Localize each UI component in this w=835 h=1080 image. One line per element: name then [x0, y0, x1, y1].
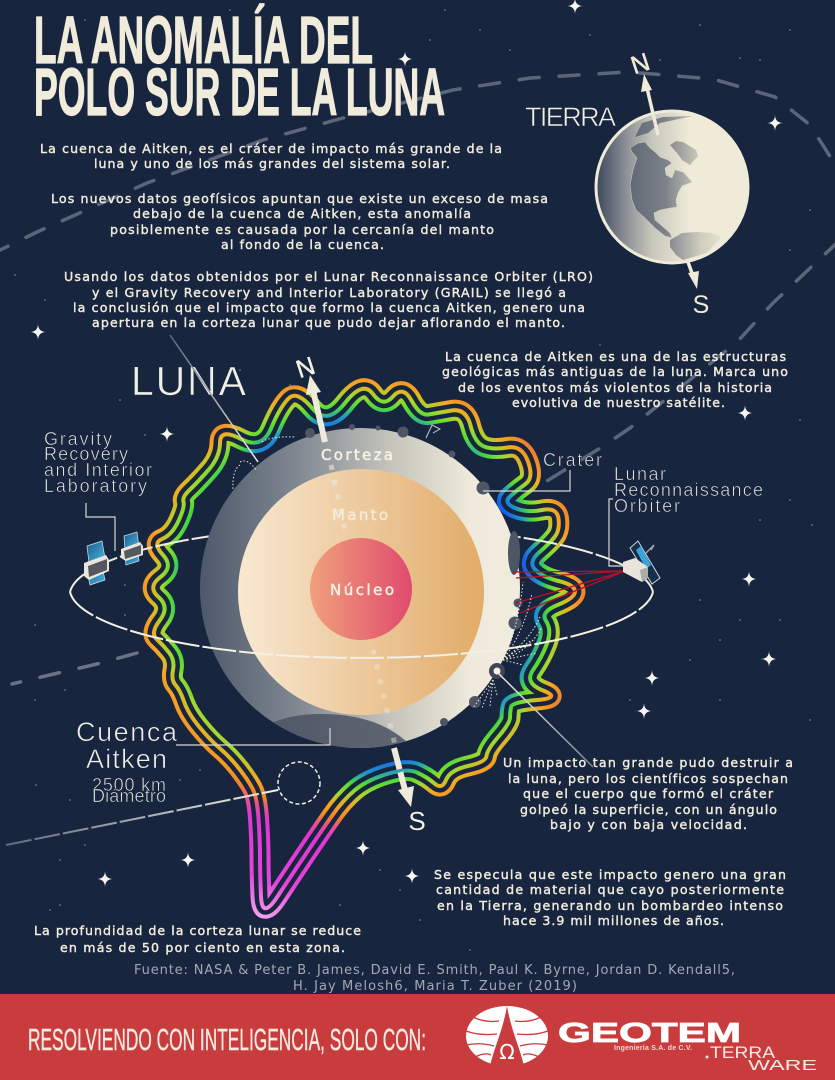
leader: impact — [497, 672, 593, 767]
impact crater marker — [489, 663, 505, 679]
moon axis S arrow — [394, 748, 426, 836]
orbit streak: lower right — [517, 240, 835, 497]
earth globe — [596, 111, 748, 263]
rim craters — [305, 424, 522, 726]
right text: Aitken structure: geológicas más antiguas de la luna. Marca uno — [442, 364, 788, 379]
impact ejecta rays — [233, 437, 542, 708]
right text: Aitken structure — [442, 349, 788, 410]
text: impact hypothesis: Un impacto tan grande pudo destruir a — [503, 755, 793, 770]
label: Cuenca Aitken: Cuenca — [76, 717, 178, 747]
text: impact hypothesis: que el cuerpo que formó el cráter — [523, 786, 774, 801]
label: diameter: Diámetro — [92, 786, 166, 806]
label: Gravity Recovery and Interior Laboratory — [44, 429, 152, 496]
text: crust depth: La profundidad de la corteza lunar se reduce — [34, 923, 361, 938]
label: Lunar Reconnaissance Orbiter: Reconnaissance — [614, 480, 763, 500]
logo: Terra Ware: WARE — [748, 1057, 817, 1074]
intro paragraph 3: apertura en la corteza lunar que pudo dejar aflorando el manto. — [92, 315, 565, 330]
text: impact hypothesis — [503, 755, 793, 832]
label: Crater: Crater — [543, 450, 602, 470]
earth axis S arrow — [688, 262, 709, 319]
text: bombardment: cantidad de material que cayo posteriormente — [436, 882, 784, 897]
leader: LRO — [609, 499, 623, 566]
moon: Manto — [332, 506, 388, 524]
source credit — [134, 963, 735, 994]
text: bombardment: Se especula que este impacto genero una gran — [434, 867, 786, 882]
earth axis S arrow: S — [693, 291, 709, 319]
rainbow gravity wave — [153, 389, 575, 908]
right text: Aitken structure: evolutiva de nuestro satélite. — [512, 395, 725, 410]
mantle — [238, 469, 484, 715]
intro paragraph 2: posiblemente es causada por la cercanía del manto — [110, 222, 494, 237]
label: Gravity Recovery and Interior Laboratory: Recovery — [44, 444, 128, 464]
source credit: H. Jay Melosh6, Maria T. Zuber (2019) — [293, 979, 577, 994]
moon: Núcleo — [330, 581, 394, 599]
intro paragraph 2: debajo de la cuenca de Aitken, esta anomalía — [133, 206, 471, 221]
continents — [630, 116, 722, 260]
intro paragraph 3: y el Gravity Recovery and Interior Laboratory (GRAIL) se llegó a — [92, 285, 566, 300]
text: impact hypothesis: la luna, pero los científicos sospechan — [508, 771, 788, 786]
crust — [200, 428, 520, 748]
earth axis N arrow — [627, 48, 658, 135]
intro paragraph 2: Los nuevos datos geofísicos apuntan que existe un exceso de masa — [51, 191, 548, 206]
title: LA ANOMALÍA DEL — [34, 3, 373, 78]
text: bombardment: en la Tierra, generando un bombardeo intenso — [437, 898, 783, 913]
intro paragraph 3: la conclusión que el impacto que formo la cuenca Aitken, genero una — [73, 300, 585, 315]
impactor trail — [6, 790, 278, 845]
source credit: Fuente: NASA & Peter B. James, David E. Smith, Paul K. Byrne, Jordan D. Kendall5, — [134, 963, 735, 978]
dotted axis south — [373, 650, 395, 745]
intro paragraph 1: La cuenca de Aitken, es el cráter de impacto más grande de la — [40, 141, 502, 156]
logo: Geotem globe — [466, 1006, 548, 1066]
text: bombardment — [434, 867, 786, 928]
leader: GRAIL — [86, 503, 115, 551]
text: impact hypothesis: bajo y con baja velocidad. — [550, 817, 747, 832]
leader: Crater — [483, 470, 570, 491]
label: Lunar Reconnaissance Orbiter — [614, 464, 763, 516]
label: Tierra: TIERRA — [525, 102, 616, 132]
satellite: GRAIL 2 — [121, 532, 143, 565]
Aitken basin — [274, 714, 406, 748]
moon axis S arrow: S — [408, 806, 426, 836]
label: diameter: 2500 km — [92, 775, 166, 795]
intro paragraph 1: luna y uno de los más grandes del sistema solar. — [94, 156, 450, 171]
LRO scan beams — [513, 571, 625, 613]
moon axis N arrow — [293, 352, 325, 442]
leader: Cuenca Aitken — [176, 728, 330, 745]
text: bombardment: hace 3.9 mil millones de años. — [503, 913, 724, 928]
earth axis N arrow: N — [627, 48, 653, 80]
logo: Terra Ware — [706, 1044, 817, 1074]
text: impact hypothesis: golpeó la superficie, con un ángulo — [520, 802, 777, 817]
orbit streak: top — [0, 72, 835, 255]
logo: Geotem wordmark: GEOTEM — [558, 1017, 741, 1048]
label: Gravity Recovery and Interior Laboratory: Laboratory — [44, 476, 147, 496]
core — [310, 538, 412, 640]
satellite: GRAIL 1 — [84, 541, 109, 585]
orbit back arc — [70, 526, 653, 592]
logo: Terra Ware: TERRA — [710, 1044, 775, 1062]
title: POLO SUR DE LA LUNA — [34, 55, 445, 130]
intro paragraph 3 — [64, 269, 593, 330]
text: crust depth: en más de 50 por ciento en esta zona. — [60, 940, 345, 955]
intro paragraph 2 — [51, 191, 548, 252]
satellite: LRO — [623, 541, 660, 584]
label: Cuenca Aitken: Aitken — [86, 744, 167, 774]
label: Lunar Reconnaissance Orbiter: Orbiter — [614, 496, 680, 516]
moon — [200, 424, 522, 760]
label: Lunar Reconnaissance Orbiter: Lunar — [614, 464, 666, 484]
label: Luna: LUNA — [131, 358, 247, 404]
label: Gravity Recovery and Interior Laboratory: Gravity — [44, 429, 112, 449]
title — [34, 3, 445, 130]
layer labels: Corteza — [321, 446, 393, 464]
dotted axis north — [331, 465, 345, 530]
orbit streak: lower left — [12, 653, 137, 684]
intro paragraph 3: Usando los datos obtenidos por el Lunar Reconnaissance Orbiter (LRO) — [64, 269, 593, 284]
leader: Luna — [170, 335, 258, 462]
impactor dashed circle — [278, 762, 320, 804]
footer slogan: RESOLVIENDO CON INTELIGENCIA, SOLO CON: — [28, 1022, 426, 1057]
right text: Aitken structure: La cuenca de Aitken es una de las estructuras — [445, 349, 786, 364]
label: Gravity Recovery and Interior Laboratory: and Interior — [44, 460, 152, 480]
label: diameter — [92, 775, 166, 806]
flag on the moon — [426, 425, 440, 438]
text: crust depth — [34, 923, 361, 955]
footer banner — [0, 994, 835, 1080]
intro paragraph 2: al fondo de la cuenca. — [221, 237, 384, 252]
label: Cuenca Aitken — [76, 717, 178, 774]
logo: Geotem globe: Ω — [499, 1040, 515, 1064]
orbit front arc — [70, 592, 653, 658]
right text: Aitken structure: de los eventos más violentos de la historia — [458, 380, 772, 395]
intro paragraph 1 — [40, 141, 502, 171]
logo: Geotem subtitle: Ingeniería S.A. de C.V. — [614, 1045, 692, 1052]
moon axis N arrow: N — [293, 352, 319, 384]
